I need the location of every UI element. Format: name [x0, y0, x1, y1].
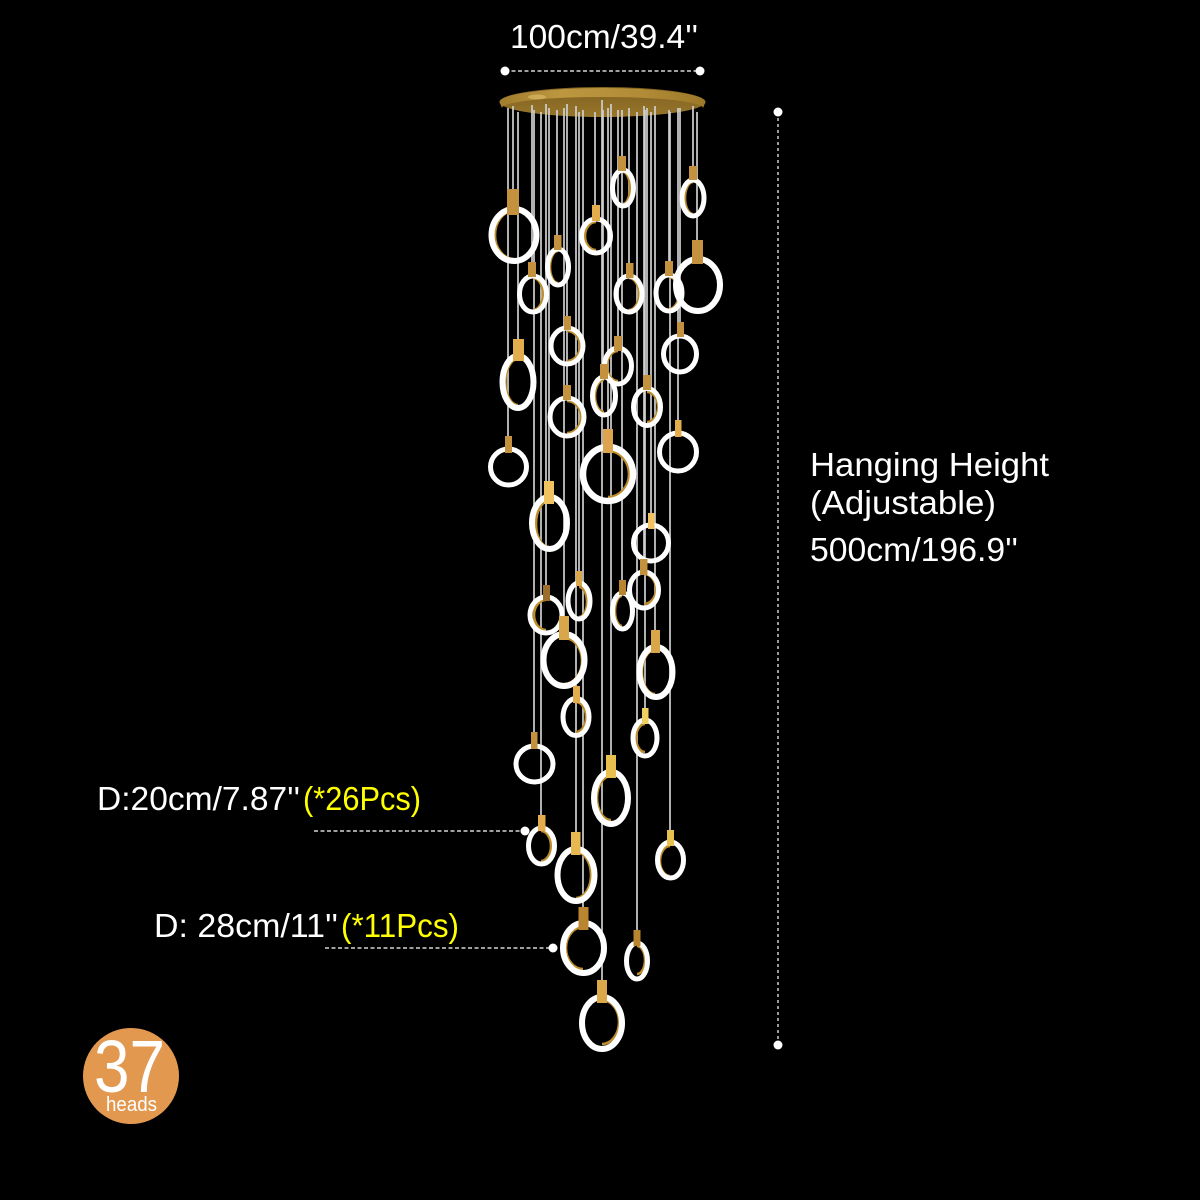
height dimension line — [774, 108, 782, 1050]
ring 32 — [528, 815, 554, 864]
hanging wires — [508, 100, 697, 980]
ring 31 — [594, 755, 628, 824]
ring 5 — [548, 235, 568, 285]
ring 35 — [563, 907, 604, 973]
ring 36 — [626, 930, 648, 979]
ring 37 — [582, 980, 622, 1049]
ring 33 — [658, 830, 684, 878]
ring 29 — [633, 708, 657, 756]
ring 16 — [550, 385, 584, 436]
large ring callout — [154, 907, 558, 952]
badge: 37 heads: heads — [106, 1094, 157, 1116]
small ring callout: (*26Pcs) — [303, 780, 421, 817]
width dimension — [500, 18, 704, 76]
width dimension: 100cm/39.4'' — [510, 18, 698, 55]
ring 17 — [490, 436, 526, 485]
ring 15 — [634, 375, 660, 426]
ring 10 — [551, 316, 583, 364]
ring 9 — [676, 240, 720, 311]
ring 25 — [530, 585, 562, 633]
ring 11 — [664, 322, 696, 372]
ring 8 — [656, 261, 682, 311]
ring 6 — [520, 262, 546, 312]
ring 2 — [612, 156, 634, 206]
ring 7 — [616, 263, 642, 312]
ring 27 — [640, 630, 672, 697]
ring 24 — [568, 571, 590, 619]
ring 18 — [583, 429, 633, 501]
ring 20 — [532, 481, 567, 549]
ring 13 — [604, 336, 632, 384]
ring 12 — [502, 339, 534, 408]
ring 34 — [558, 832, 594, 901]
small ring callout — [97, 780, 530, 836]
ring 4 — [582, 205, 610, 253]
ring 22 — [630, 559, 658, 608]
ring 19 — [660, 420, 696, 471]
large ring callout: (*11Pcs) — [341, 907, 459, 944]
large ring callout: D: 28cm/11'' — [154, 907, 338, 944]
hanging height label — [810, 446, 1049, 568]
ring 3 — [682, 166, 704, 216]
badge: 37 heads: 37 — [94, 1025, 165, 1108]
hanging height label: Hanging Height — [810, 446, 1049, 483]
hanging height label: (Adjustable) — [810, 484, 996, 521]
ring 1 — [492, 189, 536, 261]
hanging height label: 500cm/196.9'' — [810, 531, 1018, 568]
canopy — [500, 87, 706, 117]
ring 23 — [612, 580, 632, 629]
ring 14 — [592, 364, 616, 415]
ring 28 — [563, 686, 589, 736]
ring 21 — [634, 513, 668, 561]
ring 26 — [544, 616, 584, 686]
ring 30 — [516, 732, 553, 782]
small ring callout: D:20cm/7.87'' — [97, 780, 300, 817]
